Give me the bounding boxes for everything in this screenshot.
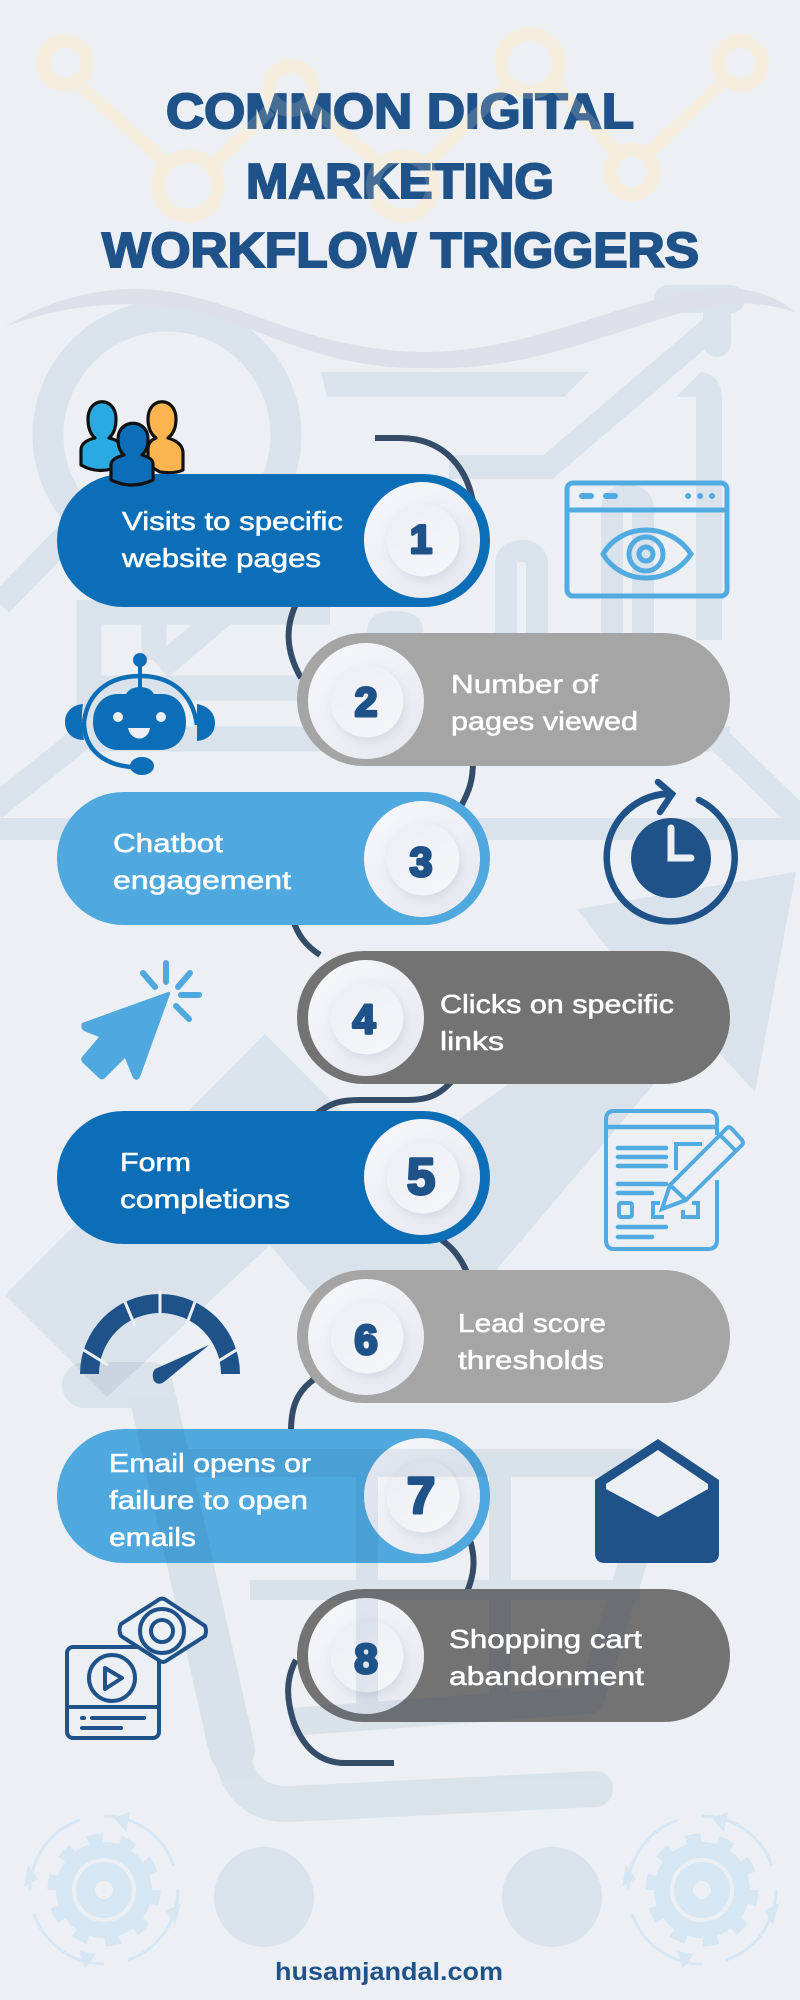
background: gear left (24, 1812, 181, 1968)
step numbers: 6 (354, 1316, 378, 1363)
step 2 label: pages viewed (451, 706, 638, 736)
step 8 label: Shopping cart (449, 1624, 643, 1654)
step 4 label: Clicks on specific (440, 989, 674, 1019)
step 1 label: website pages (121, 543, 321, 573)
step 8 label: abandonment (449, 1661, 645, 1691)
step numbers: 7 (407, 1467, 435, 1524)
step 1 label (121, 506, 343, 573)
step 4 pill (297, 951, 730, 1084)
title: COMMON DIGITAL (166, 85, 634, 139)
background: shopping cart overlay (85, 1385, 656, 1804)
step 6 label: Lead score (458, 1308, 606, 1338)
footer website: husamjandal.com (275, 1958, 503, 1986)
step 2 label: Number of (451, 669, 599, 699)
step 5 label: Form (120, 1147, 191, 1177)
background: cart wheel left (214, 1847, 314, 1947)
background: rising zigzag arrow (5, 872, 796, 1397)
step 3 label: Chatbot (113, 828, 224, 858)
step 6 label: thresholds (458, 1345, 604, 1375)
icon: lead score gauge (80, 1290, 240, 1384)
step 7 label: failure to open (109, 1485, 308, 1515)
title: MARKETING (246, 155, 554, 209)
step 6 pill (297, 1270, 730, 1403)
step 6 label (458, 1308, 606, 1375)
step 3 label: engagement (113, 865, 292, 895)
step 1 pill (57, 474, 490, 607)
step 3 pill (57, 792, 490, 925)
background: analytics and house line art (0, 299, 800, 830)
step 1 label: Visits to specific (122, 506, 343, 536)
step numbers: 8 (354, 1635, 378, 1682)
background: network nodes overlay on title (158, 34, 654, 216)
background: gear right (622, 1812, 779, 1968)
icon: video and eye (67, 1599, 206, 1738)
background: cart wheel right (502, 1847, 602, 1947)
background: network nodes (43, 34, 762, 216)
step 5 pill (57, 1111, 490, 1244)
connector line (288, 438, 474, 1763)
step 7 label: emails (109, 1522, 196, 1552)
step 4 label: links (440, 1026, 504, 1056)
step 7 pill (57, 1429, 490, 1563)
step 2 pill (297, 633, 730, 766)
step numbers: 3 (410, 839, 432, 885)
step 5 label: completions (120, 1184, 290, 1214)
step 8 label (449, 1624, 645, 1691)
icon: clock with refresh arrow (607, 782, 735, 921)
step 5 label (120, 1147, 290, 1214)
step numbers: 5 (407, 1148, 435, 1205)
step 7 label (109, 1448, 311, 1552)
step numbers: 1 (410, 518, 432, 562)
step 2 label (451, 669, 638, 736)
step 8 pill (297, 1589, 730, 1722)
icon: mouse cursor click (81, 963, 199, 1080)
icon: browser with eye (567, 483, 727, 596)
title: WORKFLOW TRIGGERS (102, 224, 699, 278)
icon: form and pencil (606, 1111, 743, 1249)
step 7 label: Email opens or (109, 1448, 311, 1478)
background: wave (5, 288, 795, 368)
icon: chatbot with headset (65, 653, 215, 775)
step 3 label (113, 828, 292, 895)
icon: open envelope (595, 1439, 719, 1563)
step numbers: 4 (353, 996, 376, 1042)
step numbers (353, 518, 435, 1682)
title (102, 85, 699, 278)
step numbers: 2 (355, 679, 377, 725)
step 4 label (440, 989, 674, 1056)
icon: group of people (81, 402, 183, 485)
